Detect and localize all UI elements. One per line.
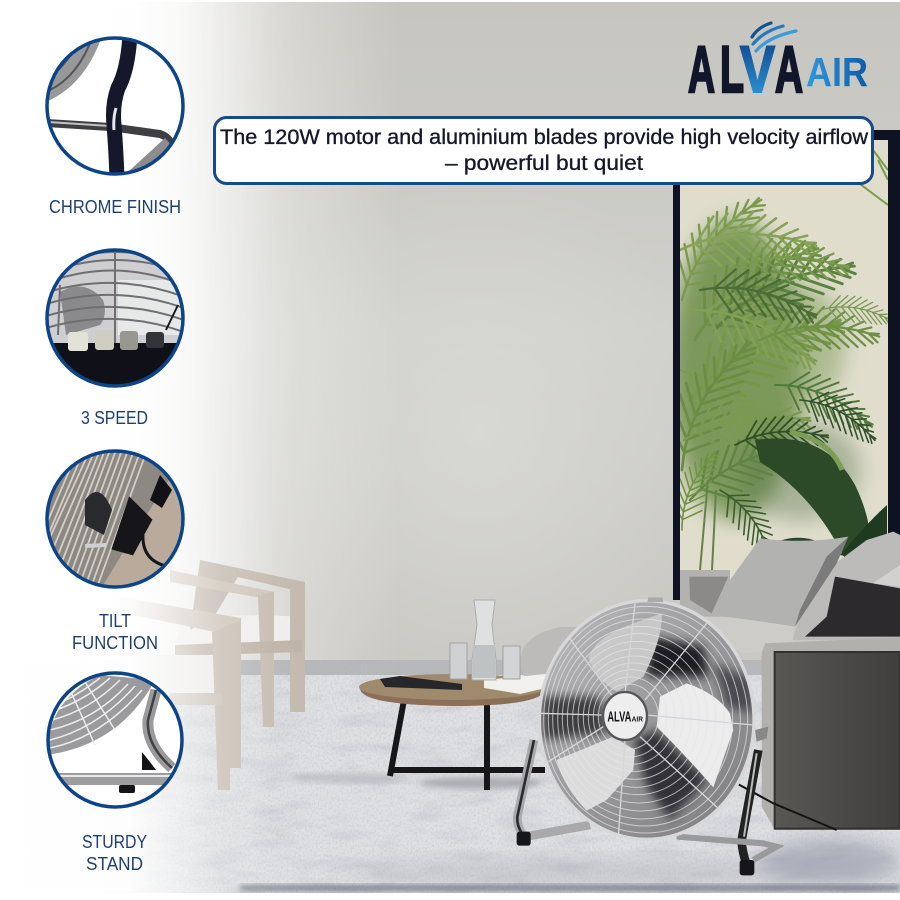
callout: motor statement: – powerful but quiet [445, 152, 643, 175]
blades [588, 613, 662, 692]
book [484, 674, 546, 694]
window with plants [651, 130, 900, 600]
stand [517, 740, 590, 837]
chairs [120, 560, 305, 790]
logo: Alva Air: L [720, 32, 744, 106]
fan product: AIR [632, 715, 644, 724]
inset circle: speed knobs [46, 250, 184, 391]
rim [539, 601, 754, 839]
back cushion [680, 570, 730, 617]
white fade overlay [0, 0, 300, 893]
label: CHROME FINISH [49, 197, 181, 217]
arm [762, 637, 900, 830]
dark gaps [647, 637, 708, 677]
feature: sturdy stand: STAND [86, 854, 143, 874]
logo: Alva Air: A [775, 32, 803, 106]
sofa left cushion behind fan [520, 627, 600, 680]
background: room wall [0, 0, 900, 665]
radial wires [538, 603, 753, 837]
banana leaf [755, 438, 870, 565]
cage body [539, 601, 754, 839]
feature: sturdy stand [46, 673, 182, 874]
hub [603, 692, 647, 740]
sofa [520, 532, 900, 830]
fan product [517, 597, 777, 875]
label: 3 SPEED [81, 408, 148, 428]
inset circle: chrome tube [44, 34, 185, 185]
feature: tilt function: FUNCTION [72, 633, 158, 653]
inset circle: stand [46, 673, 182, 807]
pillow [712, 537, 848, 627]
label: STURDY [82, 832, 147, 852]
logo: Alva Air [688, 23, 868, 106]
wire rings [544, 606, 748, 833]
big cushion [793, 532, 900, 640]
callout: motor statement [214, 118, 872, 184]
seat [700, 617, 793, 653]
logo swoosh [752, 23, 796, 51]
hub logo: ALVA [607, 710, 632, 726]
rear chair [175, 615, 302, 643]
front chair [120, 655, 238, 695]
tray [380, 676, 462, 690]
logo: Alva Air: AIR [806, 49, 868, 95]
feature: 3 speed [46, 250, 184, 428]
feature: chrome finish [44, 34, 185, 217]
carafe and glasses [450, 600, 520, 680]
inset circle: tilt knob [40, 450, 183, 590]
logo: Alva Air: V [740, 32, 775, 106]
label: TILT [99, 611, 131, 631]
rug / floor [0, 660, 900, 900]
logo: Alva Air: A [688, 32, 715, 106]
dark cushion [805, 577, 900, 637]
coffee table [359, 600, 547, 790]
feature: tilt function [40, 450, 183, 653]
callout: motor statement: The 120W motor and aluminium blades provide high velocity airflow [220, 126, 869, 149]
